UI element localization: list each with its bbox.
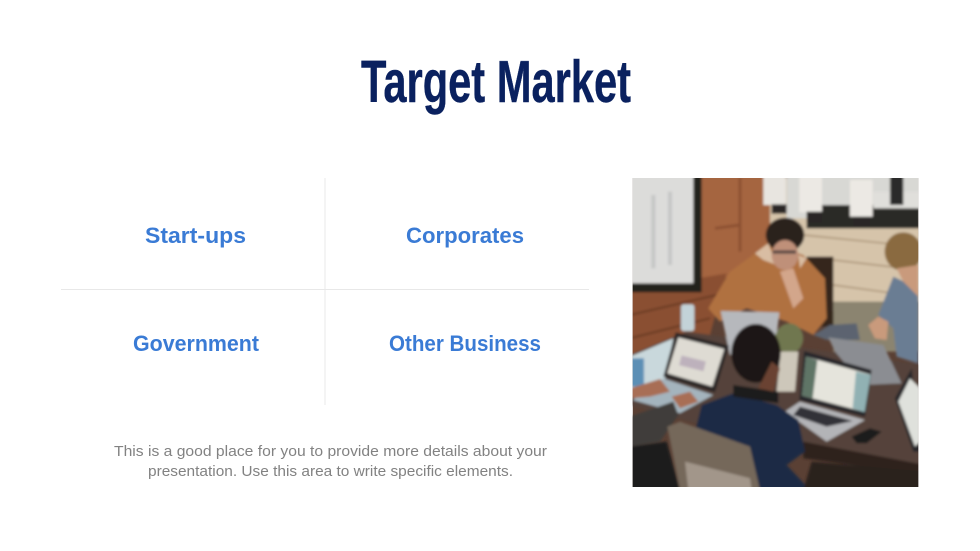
back laptops [721, 311, 779, 355]
phone [852, 428, 882, 443]
title: Target Market [361, 49, 631, 115]
label: Start-ups: Start-ups [145, 223, 246, 248]
table [630, 332, 925, 468]
plant [775, 323, 803, 353]
center laptop [799, 351, 872, 417]
chair behind [807, 257, 833, 327]
description text [114, 443, 547, 480]
right laptop [895, 368, 920, 452]
wood panels [695, 175, 770, 278]
description text: presentation. Use this area to write specific elements. [148, 463, 513, 480]
lamps [787, 175, 925, 218]
slide [61, 58, 918, 487]
person in orange hoodie [708, 243, 827, 335]
photo: team working at laptops [630, 175, 927, 490]
label: Government: Government [133, 331, 260, 356]
water bottle [681, 304, 694, 331]
window [630, 175, 702, 292]
person right [878, 277, 918, 363]
chair [667, 422, 760, 490]
left laptop [663, 332, 729, 392]
man in navy shirt [695, 393, 810, 490]
label: Corporates: Corporates [406, 223, 524, 248]
wall logs [768, 178, 918, 304]
label: Other Business: Other Business [389, 331, 541, 356]
left person arms [630, 379, 670, 398]
description text: This is a good place for you to provide more details about your [114, 443, 547, 460]
quadrant grid [61, 178, 589, 405]
